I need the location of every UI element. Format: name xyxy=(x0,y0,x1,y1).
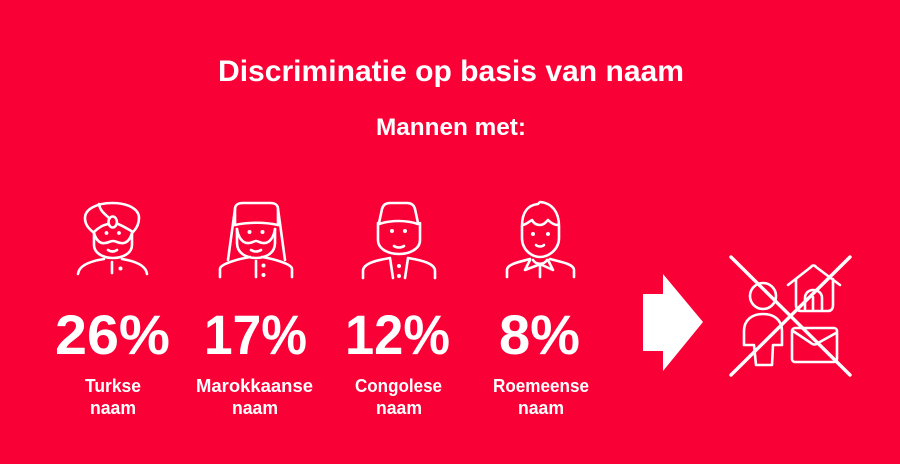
statistic: Turkse naam: 26% xyxy=(55,303,170,366)
icon: man with turban xyxy=(78,203,147,274)
statistic: Marokkaanse naam xyxy=(196,303,313,418)
statistic: Congolese naam: 12% xyxy=(345,303,450,366)
statistic: Turkse naam: Turkse xyxy=(85,376,141,396)
statistic: Turkse naam xyxy=(55,303,170,418)
statistic: Congolese naam: naam xyxy=(376,398,422,418)
statistic: Turkse naam: naam xyxy=(90,398,136,418)
icon: man with Congolese cap xyxy=(363,203,435,278)
icon: young man with short hair xyxy=(507,202,574,277)
title: Discriminatie op basis van naam xyxy=(218,55,684,88)
icon: man with Moroccan cap xyxy=(220,203,292,277)
statistic: Roemeense naam xyxy=(493,303,589,418)
statistic: Congolese naam: Congolese xyxy=(355,376,442,396)
statistic: Congolese naam xyxy=(345,303,450,418)
statistic: Marokkaanse naam: Marokkaanse xyxy=(196,376,313,396)
icon: house xyxy=(788,266,840,311)
statistic: Roemeense naam: 8% xyxy=(499,303,580,366)
statistic: Marokkaanse naam: naam xyxy=(232,398,278,418)
arrow xyxy=(643,274,703,371)
icon: mail xyxy=(792,328,837,362)
statistic: Roemeense naam: naam xyxy=(518,398,564,418)
statistic: Roemeense naam: Roemeense xyxy=(493,376,589,396)
statistic: Marokkaanse naam: 17% xyxy=(204,303,307,366)
icon: person xyxy=(744,283,782,365)
icon: crossed-out person, house and mail xyxy=(731,257,850,375)
subtitle: Mannen met: xyxy=(376,114,526,141)
cross xyxy=(731,257,850,375)
